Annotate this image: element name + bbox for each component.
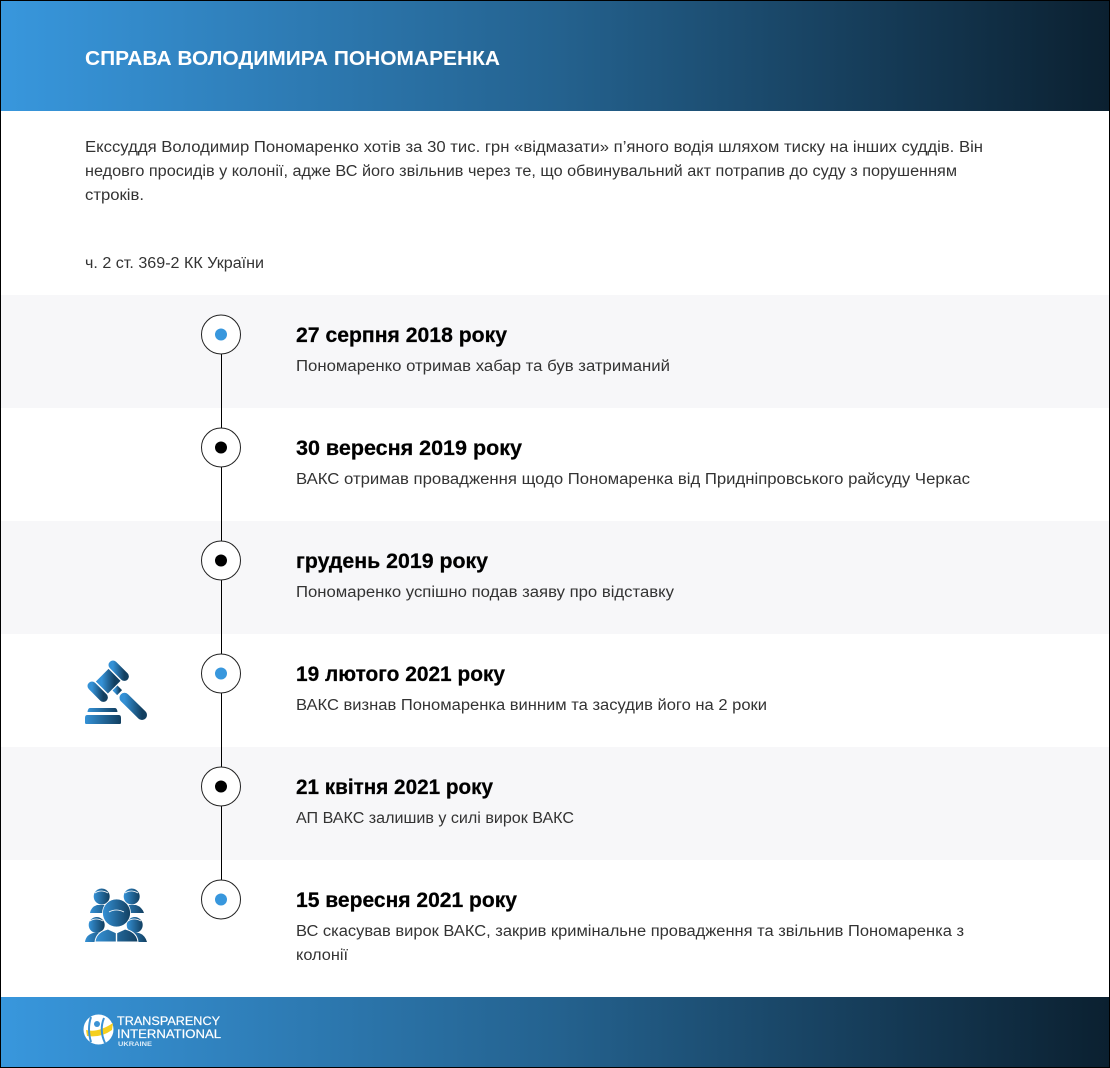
icon: group of judges [85,888,147,942]
intro paragraph: строків. [85,187,144,204]
logo: Transparency International Ukraine: INTERNATIONAL [117,1027,221,1041]
row band: 27 August 2018 [0,295,1110,408]
event 2: 30 вересня 2019 року [296,437,522,460]
event 4: 19 лютого 2021 року [296,663,505,686]
row band: 21 April 2021 [0,747,1110,860]
timeline marker 2 [202,428,240,467]
timeline marker 3 [202,541,240,580]
timeline axis [220,335,222,900]
event 5: АП ВАКС залишив у силі вирок ВАКС [296,810,574,827]
timeline marker 5 [202,767,240,806]
footer banner [0,997,1110,1068]
event 4: ВАКС визнав Пономаренка винним та засудив його на 2 роки [296,697,767,714]
event 2 [296,437,970,488]
title: СПРАВА ВОЛОДИМИРА ПОНОМАРЕНКА [85,47,500,70]
event 5 [296,776,574,827]
event 6: колонії [296,947,349,964]
icon: judge gavel [85,665,142,724]
event 3 [296,550,674,601]
intro paragraph: недовго просидів у колонії, адже ВС його звільнив через те, що обвинувальний акт потрапив до суду з порушенням [85,163,957,180]
row band: December 2019 [0,521,1110,634]
event 1: Пономаренко отримав хабар та був затриманий [296,358,670,375]
event 5: 21 квітня 2021 року [296,776,493,799]
header banner [0,0,1110,111]
logo: Transparency International Ukraine [84,1014,221,1048]
timeline marker 1 [202,315,240,354]
event 3: грудень 2019 року [296,550,488,573]
event 6 [296,889,964,964]
logo: Transparency International Ukraine: UKRAINE [118,1041,153,1048]
logo: Transparency International Ukraine: TRANSPARENCY [117,1014,220,1028]
event 6: ВС скасував вирок ВАКС, закрив кримінальне провадження та звільнив Пономаренка з [296,923,964,940]
event 3: Пономаренко успішно подав заяву про відставку [296,584,674,601]
intro paragraph [85,139,983,204]
event 4 [296,663,767,714]
timeline marker 6 [202,880,240,919]
legal article reference: ч. 2 ст. 369-2 КК України [85,255,264,272]
event 1: 27 серпня 2018 року [296,324,507,347]
timeline marker 4 [202,654,240,693]
event 1 [296,324,670,375]
event 6: 15 вересня 2021 року [296,889,517,912]
intro paragraph: Екссуддя Володимир Пономаренко хотів за 30 тис. грн «відмазати» п’яного водія шляхом тиску на інших суддів. Він [85,139,983,156]
event 2: ВАКС отримав провадження щодо Пономаренка від Придніпровського райсуду Черкас [296,471,970,488]
